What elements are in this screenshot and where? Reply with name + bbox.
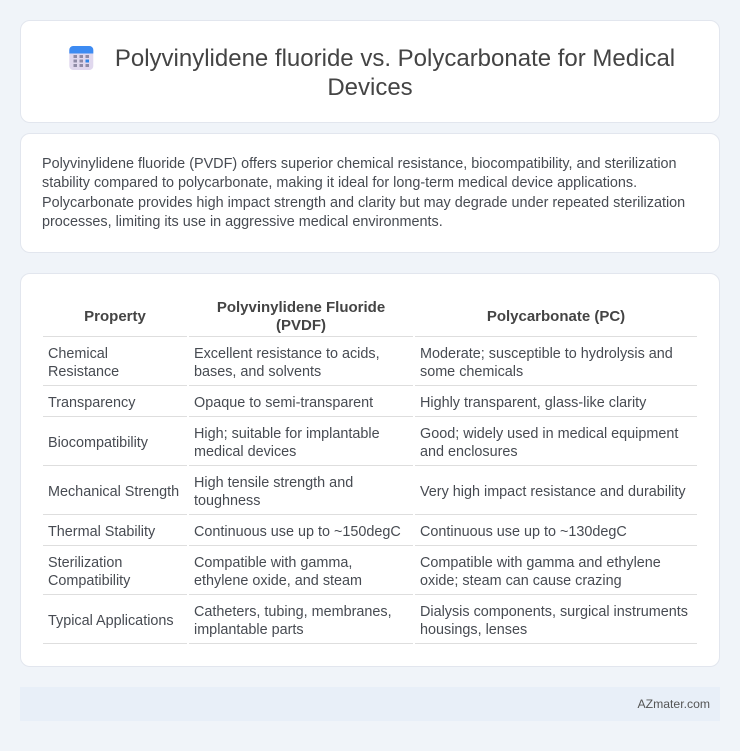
row: sterilization compatibility: ethylene oxide, and steam xyxy=(194,573,362,589)
row: sterilization compatibility: Compatible with gamma, xyxy=(194,555,352,571)
row: biocompatibility xyxy=(48,426,678,460)
row: thermal stability: Continuous use up to ~150degC xyxy=(194,524,401,540)
row: thermal stability xyxy=(48,524,627,540)
row: mechanical strength: High tensile strength and xyxy=(194,475,353,491)
table header: Polyvinylidene Fluoride xyxy=(217,299,385,316)
row: chemical resistance: Moderate; susceptible to hydrolysis and xyxy=(420,346,673,362)
row: chemical resistance xyxy=(48,346,673,380)
row: chemical resistance: Resistance xyxy=(48,364,119,380)
row: chemical resistance: Chemical xyxy=(48,346,108,362)
row: sterilization compatibility: Compatible with gamma and ethylene xyxy=(420,555,661,571)
summary text: stability compared to polycarbonate, making it ideal for long-term medical device applications. xyxy=(42,175,637,191)
row: biocompatibility: and enclosures xyxy=(420,444,518,460)
row: mechanical strength: Very high impact resistance and durability xyxy=(420,484,686,500)
table header: Property xyxy=(84,308,146,325)
row: chemical resistance: Excellent resistance to acids, xyxy=(194,346,380,362)
row: mechanical strength: toughness xyxy=(194,493,260,509)
row: transparency: Opaque to semi-transparent xyxy=(194,395,373,411)
summary text xyxy=(42,156,685,230)
footer bar xyxy=(20,687,720,721)
row: chemical resistance: bases, and solvents xyxy=(194,364,321,380)
summary text: processes, limiting its use in aggressive medical environments. xyxy=(42,214,443,230)
row: typical applications: Typical Applications xyxy=(48,613,174,629)
title: Polyvinylidene fluoride vs. Polycarbonate for Medical xyxy=(115,45,675,72)
row: typical applications: housings, lenses xyxy=(420,622,527,638)
row: biocompatibility: medical devices xyxy=(194,444,296,460)
row: biocompatibility: Biocompatibility xyxy=(48,435,148,451)
row: sterilization compatibility: oxide; steam can cause crazing xyxy=(420,573,622,589)
row: typical applications: implantable parts xyxy=(194,622,304,638)
summary text: Polyvinylidene fluoride (PVDF) offers superior chemical resistance, biocompatibility, and sterilization xyxy=(42,156,677,172)
title xyxy=(115,45,675,101)
row: chemical resistance: some chemicals xyxy=(420,364,523,380)
row: typical applications xyxy=(48,604,688,638)
table header: Polycarbonate (PC) xyxy=(487,308,625,325)
row: transparency xyxy=(48,395,646,411)
table header xyxy=(84,299,625,334)
row: biocompatibility: Good; widely used in medical equipment xyxy=(420,426,678,442)
panel: comparison table xyxy=(20,273,720,667)
row: sterilization compatibility: Compatibility xyxy=(48,573,130,589)
row: typical applications: Catheters, tubing, membranes, xyxy=(194,604,392,620)
row: thermal stability: Thermal Stability xyxy=(48,524,155,540)
row: mechanical strength: Mechanical Strength xyxy=(48,484,179,500)
table header: (PVDF) xyxy=(276,317,326,334)
panel: summary xyxy=(20,133,720,253)
summary text: Polycarbonate provides high impact strength and clarity but may degrade under repeated sterilization xyxy=(42,195,685,211)
row: sterilization compatibility: Sterilization xyxy=(48,555,122,571)
row: thermal stability: Continuous use up to ~130degC xyxy=(420,524,627,540)
row: sterilization compatibility xyxy=(48,555,661,589)
footer source text: AZmater.com xyxy=(638,697,710,711)
panel: title card xyxy=(20,20,720,123)
row: typical applications: Dialysis components, surgical instruments xyxy=(420,604,688,620)
title: Devices xyxy=(327,74,413,101)
row: biocompatibility: High; suitable for implantable xyxy=(194,426,380,442)
row: transparency: Transparency xyxy=(48,395,135,411)
row: mechanical strength xyxy=(48,475,686,509)
row: transparency: Highly transparent, glass-like clarity xyxy=(420,395,646,411)
icon: calendar xyxy=(69,46,94,70)
